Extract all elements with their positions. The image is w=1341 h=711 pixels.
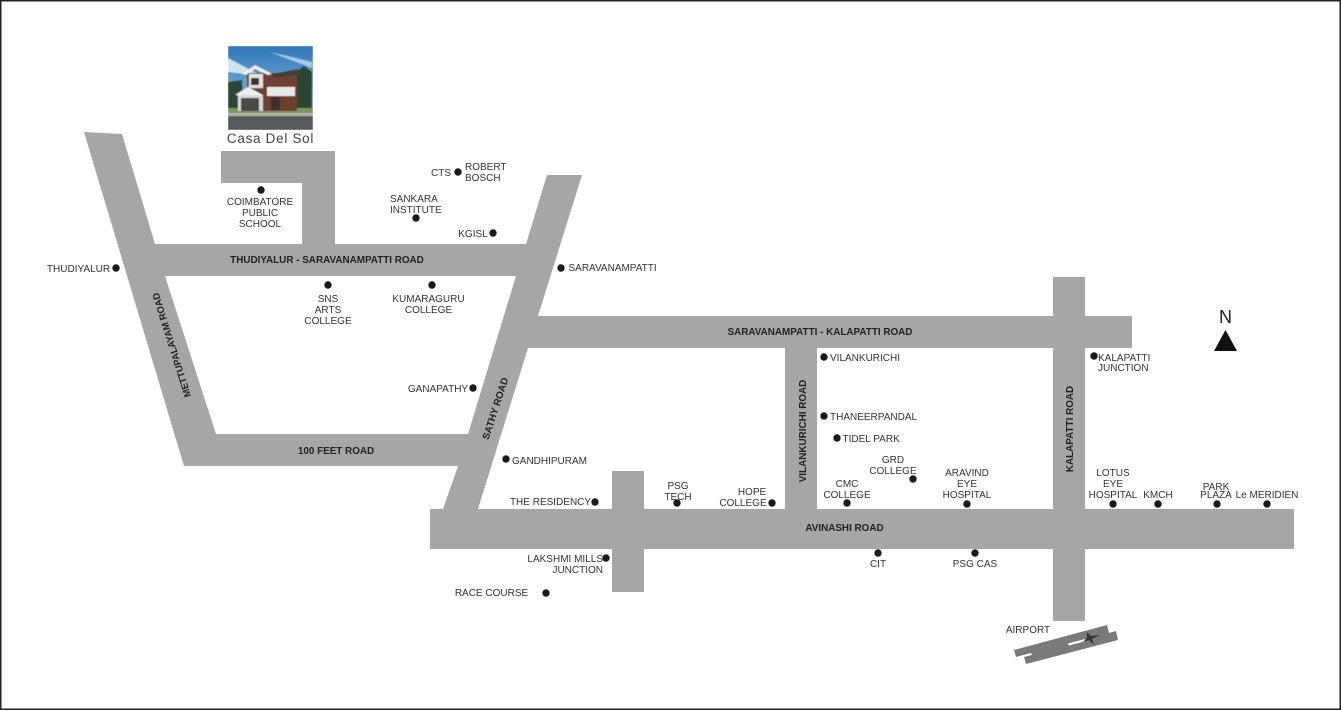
place labels: PARK <box>1203 482 1230 493</box>
place labels: TECH <box>664 492 692 503</box>
place labels: HOPE <box>738 487 766 498</box>
place labels: ARTS <box>315 305 342 316</box>
road name labels: KALAPATTI ROAD <box>1065 386 1076 472</box>
place labels: Le MERIDIEN <box>1236 490 1298 501</box>
place labels: EYE <box>957 479 977 490</box>
place labels: PSG <box>667 481 689 492</box>
place labels: VILANKURICHI <box>830 353 900 364</box>
place labels: SCHOOL <box>239 219 282 230</box>
place labels: JUNCTION <box>1098 363 1149 374</box>
road name labels: SATHY ROAD <box>481 376 511 441</box>
road name labels <box>151 255 1076 534</box>
road: link to Coimbatore Public School <box>221 151 335 245</box>
place labels: SANKARA <box>390 194 438 205</box>
place labels: COLLEGE <box>869 466 917 477</box>
place labels: CTS <box>431 168 451 179</box>
place labels: LAKSHMI MILLS <box>527 554 603 565</box>
place labels: INSTITUTE <box>390 205 442 216</box>
place labels: RACE COURSE <box>455 588 528 599</box>
place labels: KMCH <box>1143 490 1173 501</box>
road name labels: VILANKURICHI ROAD <box>798 380 809 482</box>
place labels: COIMBATORE <box>227 197 293 208</box>
place labels: THE RESIDENCY <box>510 497 591 508</box>
place labels: ROBERT <box>465 162 506 173</box>
road name labels: THUDIYALUR - SARAVANAMPATTI ROAD <box>230 255 424 266</box>
place labels: PUBLIC <box>242 208 278 219</box>
road name labels: 100 FEET ROAD <box>298 446 374 457</box>
place labels: KUMARAGURU <box>392 294 465 305</box>
place labels <box>47 162 1298 636</box>
road name labels: AVINASHI ROAD <box>805 523 884 534</box>
place labels: SNS <box>318 294 339 305</box>
place labels: THANEERPANDAL <box>830 412 917 423</box>
place labels: COLLEGE <box>405 305 452 316</box>
icon: airport runway <box>1014 625 1118 664</box>
place labels: HOSPITAL <box>943 490 992 501</box>
place labels: COLLEGE <box>823 490 871 501</box>
road network <box>84 132 1294 621</box>
place labels: BOSCH <box>465 173 501 184</box>
north arrow: N <box>1219 307 1232 327</box>
place labels: EYE <box>1103 479 1123 490</box>
place labels: AIRPORT <box>1006 625 1050 636</box>
place labels: COLLEGE <box>719 498 767 509</box>
place labels: JUNCTION <box>552 565 603 576</box>
north arrow <box>1214 307 1237 351</box>
place labels: KGISL <box>458 229 488 240</box>
place labels: SARAVANAMPATTI <box>568 263 657 274</box>
road name labels: METTUPALAYAM ROAD <box>151 291 194 398</box>
place labels: KALAPATTI <box>1098 353 1150 364</box>
place labels: COLLEGE <box>304 316 352 327</box>
inner cutouts <box>165 276 1053 509</box>
place labels: HOSPITAL <box>1089 490 1138 501</box>
place labels: GRD <box>882 455 904 466</box>
place labels: ARAVIND <box>945 468 989 479</box>
road name labels: SARAVANAMPATTI - KALAPATTI ROAD <box>728 327 912 338</box>
place labels: THUDIYALUR <box>47 264 110 275</box>
place labels: GANAPATHY <box>408 384 468 395</box>
place labels: CIT <box>870 559 886 570</box>
location markers <box>112 168 1271 597</box>
place labels: PLAZA <box>1200 490 1232 501</box>
project name: Casa Del Sol <box>227 131 314 146</box>
place labels: TIDEL PARK <box>842 434 900 445</box>
place labels: LOTUS <box>1096 468 1130 479</box>
project image: Casa Del Sol house <box>228 46 313 130</box>
place labels: GANDHIPURAM <box>512 456 587 467</box>
place labels: PSG CAS <box>953 559 998 570</box>
place labels: CMC <box>836 479 858 490</box>
